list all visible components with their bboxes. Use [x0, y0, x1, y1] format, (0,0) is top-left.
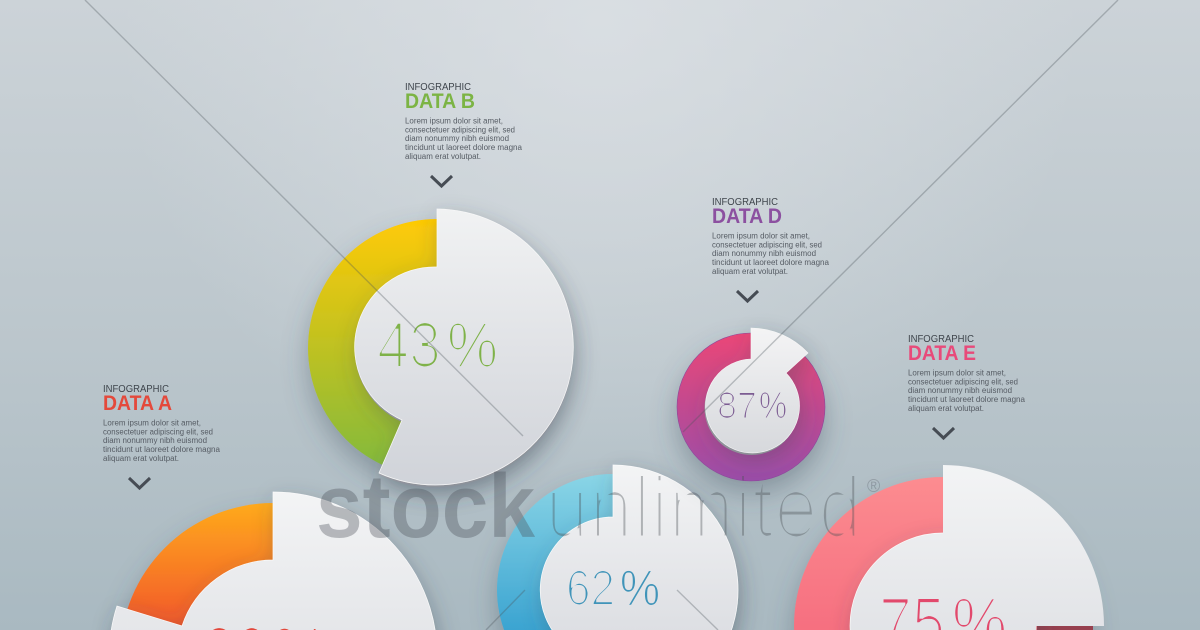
ring c: [497, 474, 729, 630]
chart: data b donut: [308, 209, 573, 487]
body text a: tincidunt ut laoreet dolore magna: [103, 445, 221, 454]
chart: data c donut: [497, 465, 738, 630]
value c: 62: [566, 560, 615, 616]
value b: [377, 309, 498, 381]
body text e: aliquam erat volutpat.: [908, 404, 984, 413]
watermark bold word: stock: [316, 457, 536, 557]
ring b: [308, 219, 566, 477]
value c: %: [620, 560, 660, 616]
disc a: [109, 492, 437, 630]
icon: chevron a: [129, 478, 150, 488]
body text b: consectetuer adipiscing elit, sed: [405, 126, 515, 134]
label: infographic d: INFOGRAPHIC: [712, 197, 778, 208]
body text b: Lorem ipsum dolor sit amet,: [405, 116, 503, 126]
body text b: [405, 116, 523, 161]
ring e: [794, 477, 1092, 630]
watermark light word: unlimited: [545, 460, 862, 556]
body text a: diam nonummy nibh euismod: [103, 436, 207, 445]
body text e: [908, 368, 1026, 413]
body text a: aliquam erat volutpat.: [103, 454, 179, 463]
value d: %: [759, 385, 787, 426]
body text a: [103, 418, 221, 463]
body text b: aliquam erat volutpat.: [405, 152, 481, 161]
value c: [566, 560, 660, 616]
body text e: tincidunt ut laoreet dolore magna: [908, 395, 1026, 404]
upper disc e: [943, 465, 1104, 630]
chart: data a donut: [109, 492, 437, 630]
body text d: Lorem ipsum dolor sit amet,: [712, 232, 810, 240]
chart: data e donut: [794, 465, 1104, 630]
body text a: consectetuer adipiscing elit, sed: [103, 428, 213, 436]
value b: %: [447, 309, 498, 381]
value d: [717, 385, 787, 426]
ring d: [677, 333, 825, 481]
value d: 87: [717, 385, 757, 426]
ring a: [120, 503, 426, 630]
body text d: aliquam erat volutpat.: [712, 267, 788, 276]
body text d: tincidunt ut laoreet dolore magna: [712, 258, 830, 267]
heading: data e: DATA E: [908, 342, 976, 365]
heading: data b: DATA B: [405, 90, 475, 113]
body text b: tincidunt ut laoreet dolore magna: [405, 143, 523, 152]
disc d lip: [704, 361, 798, 455]
inner disc e: [850, 533, 1036, 630]
chart: data d donut: [677, 328, 825, 481]
watermark registered mark: ®: [867, 476, 880, 496]
panel: data a text: [103, 384, 221, 463]
icon: chevron b: [431, 176, 452, 186]
value e: [879, 584, 1007, 630]
panel: data e text: [908, 334, 1026, 413]
disc c: [540, 465, 738, 630]
heading: data d: DATA D: [712, 205, 782, 228]
disc d: [706, 328, 808, 453]
body text b: diam nonummy nibh euismod: [405, 134, 509, 143]
body text d: diam nonummy nibh euismod: [712, 249, 816, 258]
label: infographic a: INFOGRAPHIC: [103, 384, 169, 395]
panel: data d text: [712, 197, 830, 276]
value a: [203, 614, 330, 630]
heading: data a: DATA A: [103, 392, 172, 415]
body text a: Lorem ipsum dolor sit amet,: [103, 418, 201, 428]
body text d: [712, 232, 830, 276]
watermark logo: [316, 457, 880, 557]
disc b: [355, 209, 573, 485]
body text e: consectetuer adipiscing elit, sed: [908, 378, 1018, 386]
label: infographic b: INFOGRAPHIC: [405, 82, 471, 93]
body text e: Lorem ipsum dolor sit amet,: [908, 368, 1006, 378]
value b: 43: [377, 309, 441, 381]
icon: chevron d: [737, 291, 758, 301]
disc b lip: [355, 211, 573, 487]
icon: chevron e: [933, 428, 954, 438]
body text d: consectetuer adipiscing elit, sed: [712, 240, 822, 250]
panel: data b text: [405, 82, 523, 161]
dark ring segment e: [1037, 625, 1093, 630]
body text e: diam nonummy nibh euismod: [908, 386, 1012, 395]
label: infographic e: INFOGRAPHIC: [908, 334, 974, 345]
